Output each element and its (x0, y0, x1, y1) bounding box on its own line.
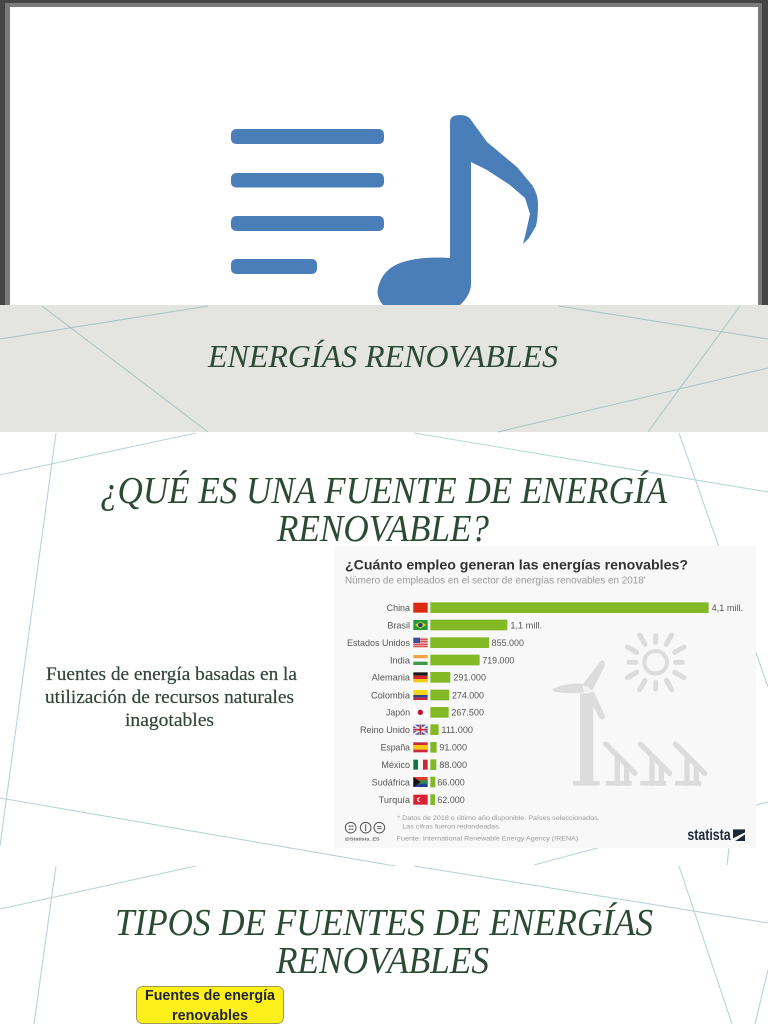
row: China: China (387, 603, 411, 613)
callout: yellow box: Fuentes de energía (145, 988, 276, 1004)
footnotes: Las cifras fueron redondeadas. (402, 825, 501, 831)
row: Alemania: Alemania (372, 673, 411, 683)
text block: definition: utilización de recursos naturales (45, 688, 294, 708)
statista logo: statista (687, 827, 731, 844)
row: Sudáfrica (372, 777, 465, 787)
row: Reino Unido (360, 724, 473, 735)
row: Japón: 267.500 (451, 708, 484, 718)
row: Brasil: Brasil (387, 620, 410, 630)
row: Colombia (371, 690, 484, 700)
row: Japón: Japón (386, 708, 410, 718)
slide background lines (0, 433, 768, 1024)
row: Alemania: 291.000 (453, 673, 486, 683)
text block: definition (45, 665, 297, 731)
illustration: wind turbine and solar panels (552, 660, 705, 786)
statista handle: @Statista_ES (345, 836, 380, 842)
heading: what is a renewable source: ¿QUÉ ES UNA FUENTE DE ENERGÍA (100, 470, 668, 512)
icon: playlist with music note (231, 115, 538, 305)
row: Brasil: 1,1 mill. (510, 620, 542, 630)
text block: definition: Fuentes de energía basadas en la (46, 665, 297, 685)
row: Sudáfrica: Sudáfrica (372, 777, 411, 787)
row: Turquía (379, 794, 465, 805)
row: México (381, 759, 467, 770)
row: India: 719.000 (482, 655, 514, 665)
row: España: 91.000 (439, 743, 467, 753)
row: España (381, 742, 467, 753)
row: Colombia: Colombia (371, 690, 411, 700)
row: España: España (381, 743, 411, 753)
row: Brasil (387, 620, 542, 630)
row: India: India (390, 655, 411, 665)
icons: creative commons (345, 822, 385, 833)
row: China: 4,1 mill. (712, 603, 743, 613)
row: Turquía: Turquía (379, 795, 411, 805)
row: Estados Unidos (347, 637, 524, 648)
callout: yellow box (136, 986, 284, 1024)
row: México: 88.000 (439, 760, 467, 770)
row: China (387, 602, 743, 613)
text block: definition: inagotables (125, 711, 214, 731)
heading: types of renewable sources: TIPOS DE FUENTES DE ENERGÍAS (115, 902, 653, 944)
chart subtitle: Número de empleados en el sector de energías renovables en 2018' (345, 576, 646, 587)
slide frame (0, 0, 768, 306)
row: Estados Unidos: 855.000 (492, 638, 524, 648)
heading: types of renewable sources (115, 902, 653, 982)
footnotes: * Datos de 2018 o último año disponible. Países seleccionados. (397, 816, 600, 822)
title band: ENERGÍAS RENOVABLES (207, 338, 558, 374)
row: Japón (386, 707, 484, 718)
row: Reino Unido: Reino Unido (360, 725, 410, 735)
chart title: ¿Cuánto empleo generan las energías renovables? (345, 557, 688, 573)
footnotes (397, 816, 600, 842)
row: Reino Unido: 111.000 (441, 725, 473, 735)
row: Colombia: 274.000 (452, 690, 484, 700)
panel: employment chart (334, 546, 756, 848)
row: México: México (381, 760, 410, 770)
row: Estados Unidos: Estados Unidos (347, 638, 410, 648)
footnotes: Fuente: International Renewable Energy Agency (IRENA) (397, 836, 578, 842)
callout: yellow box: renovables (172, 1008, 248, 1024)
row: Turquía: 62.000 (437, 795, 465, 805)
illustration: sun (627, 635, 684, 690)
heading: what is a renewable source: RENOVABLE? (276, 508, 489, 550)
title band (0, 305, 768, 432)
row: India (390, 655, 514, 665)
row: Alemania (372, 672, 486, 683)
heading: what is a renewable source (100, 470, 668, 550)
heading: types of renewable sources: RENOVABLES (275, 940, 489, 982)
row: Sudáfrica: 66.000 (437, 777, 465, 787)
